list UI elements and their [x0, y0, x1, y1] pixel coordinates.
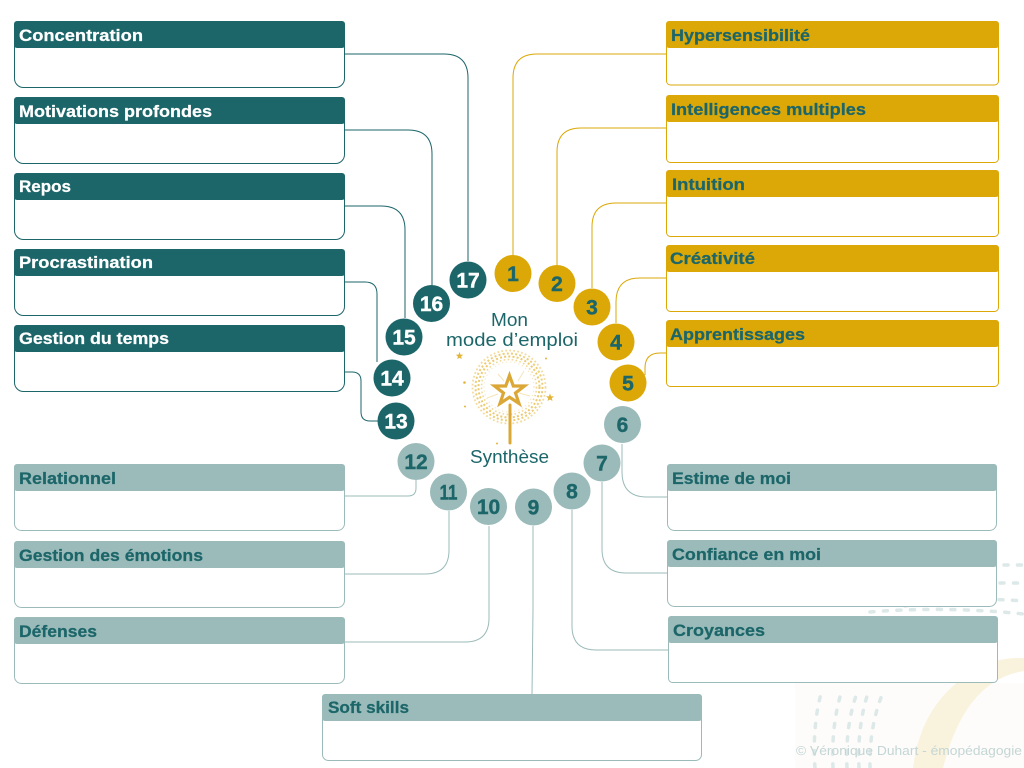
badge 12: 12 [404, 451, 428, 474]
panel: Soft skills: Soft skills [328, 699, 409, 717]
badge 17 [450, 262, 486, 298]
badge 6: 6 [617, 414, 628, 437]
panel: Motivations profondes [14, 97, 345, 164]
panel: Estime de moi: Estime de moi [672, 470, 791, 488]
badge 10: 10 [477, 496, 500, 519]
badge 15 [386, 318, 422, 356]
decorative background: bottom right [795, 565, 1024, 768]
badge 8: 8 [566, 480, 578, 504]
number badges [374, 255, 646, 526]
badge 14 [374, 360, 410, 396]
panel: Estime de moi [667, 464, 997, 530]
connectors: gold [513, 54, 666, 375]
badge 6 [604, 406, 641, 443]
title: Mon mode d'emploi [446, 310, 578, 350]
badge 2: 2 [551, 273, 563, 296]
panel: Procrastination: Procrastination [19, 254, 153, 272]
badge 12 [398, 443, 434, 480]
panel: Relationnel [14, 464, 345, 530]
panel: Relationnel: Relationnel [19, 470, 116, 488]
badge 3: 3 [586, 296, 598, 320]
badge 14: 14 [380, 368, 404, 390]
icon: magic wand with star and sparkle ring [456, 350, 554, 444]
panel: Repos: Repos [19, 178, 71, 196]
panel: Défenses [14, 617, 345, 684]
panel: Croyances: Croyances [673, 622, 765, 640]
badge 16 [413, 285, 450, 322]
label: Synthèse: Synthèse [470, 447, 549, 467]
title: Mon mode d'emploi: mode d’emploi [446, 330, 578, 350]
badge 10 [470, 488, 507, 525]
panel: Gestion du temps [14, 325, 345, 392]
connectors: light teal [345, 444, 668, 694]
panel: Gestion du temps: Gestion du temps [19, 330, 169, 348]
panel: Hypersensibilité: Hypersensibilité [671, 27, 810, 45]
badge 11 [430, 474, 467, 510]
panel: Concentration [14, 21, 345, 88]
badge 11: 11 [440, 482, 458, 504]
credit: © Véronique Duhart - émopédagogie [796, 743, 1022, 758]
badge 7: 7 [596, 452, 608, 476]
panel: Intelligences multiples [666, 95, 999, 162]
badge 13 [378, 402, 414, 440]
panel: Créativité [666, 245, 999, 312]
badge 15: 15 [392, 326, 416, 350]
badge 4: 4 [610, 332, 622, 354]
panel: Gestion des émotions: Gestion des émotions [19, 547, 203, 565]
title: Mon mode d'emploi: Mon [491, 310, 528, 330]
badge 3 [574, 288, 610, 326]
panel: Intuition [666, 170, 999, 236]
panel: Gestion des émotions [14, 541, 345, 608]
panel: Intelligences multiples: Intelligences multiples [671, 101, 866, 119]
panel: Soft skills [322, 694, 702, 760]
panel: Apprentissages [666, 320, 999, 386]
panel: Confiance en moi: Confiance en moi [672, 546, 821, 564]
badge 7 [584, 444, 620, 482]
panel: Défenses: Défenses [19, 623, 97, 641]
badge 13: 13 [384, 410, 408, 434]
badge 2 [538, 265, 576, 302]
panel: Intuition: Intuition [672, 176, 745, 194]
badge 5: 5 [622, 372, 634, 396]
badge 4 [598, 324, 634, 360]
connectors: dark teal [345, 54, 468, 421]
panel: Apprentissages: Apprentissages [670, 326, 805, 344]
badge 17: 17 [456, 270, 480, 292]
panel: Repos [14, 173, 345, 240]
badge 1 [494, 255, 532, 292]
panel: Concentration: Concentration [19, 27, 143, 45]
panel: Motivations profondes: Motivations profondes [19, 103, 212, 121]
panel: Confiance en moi [667, 540, 997, 606]
panel: Procrastination [14, 249, 345, 316]
badge 1: 1 [507, 263, 519, 286]
badge 5 [610, 364, 646, 402]
badge 16: 16 [420, 293, 443, 316]
panel: Hypersensibilité [666, 21, 999, 85]
panel: Créativité: Créativité [670, 250, 755, 268]
badge 9 [515, 488, 552, 526]
badge 8 [554, 472, 590, 510]
panel: Croyances [668, 616, 998, 682]
badge 9: 9 [528, 496, 539, 520]
